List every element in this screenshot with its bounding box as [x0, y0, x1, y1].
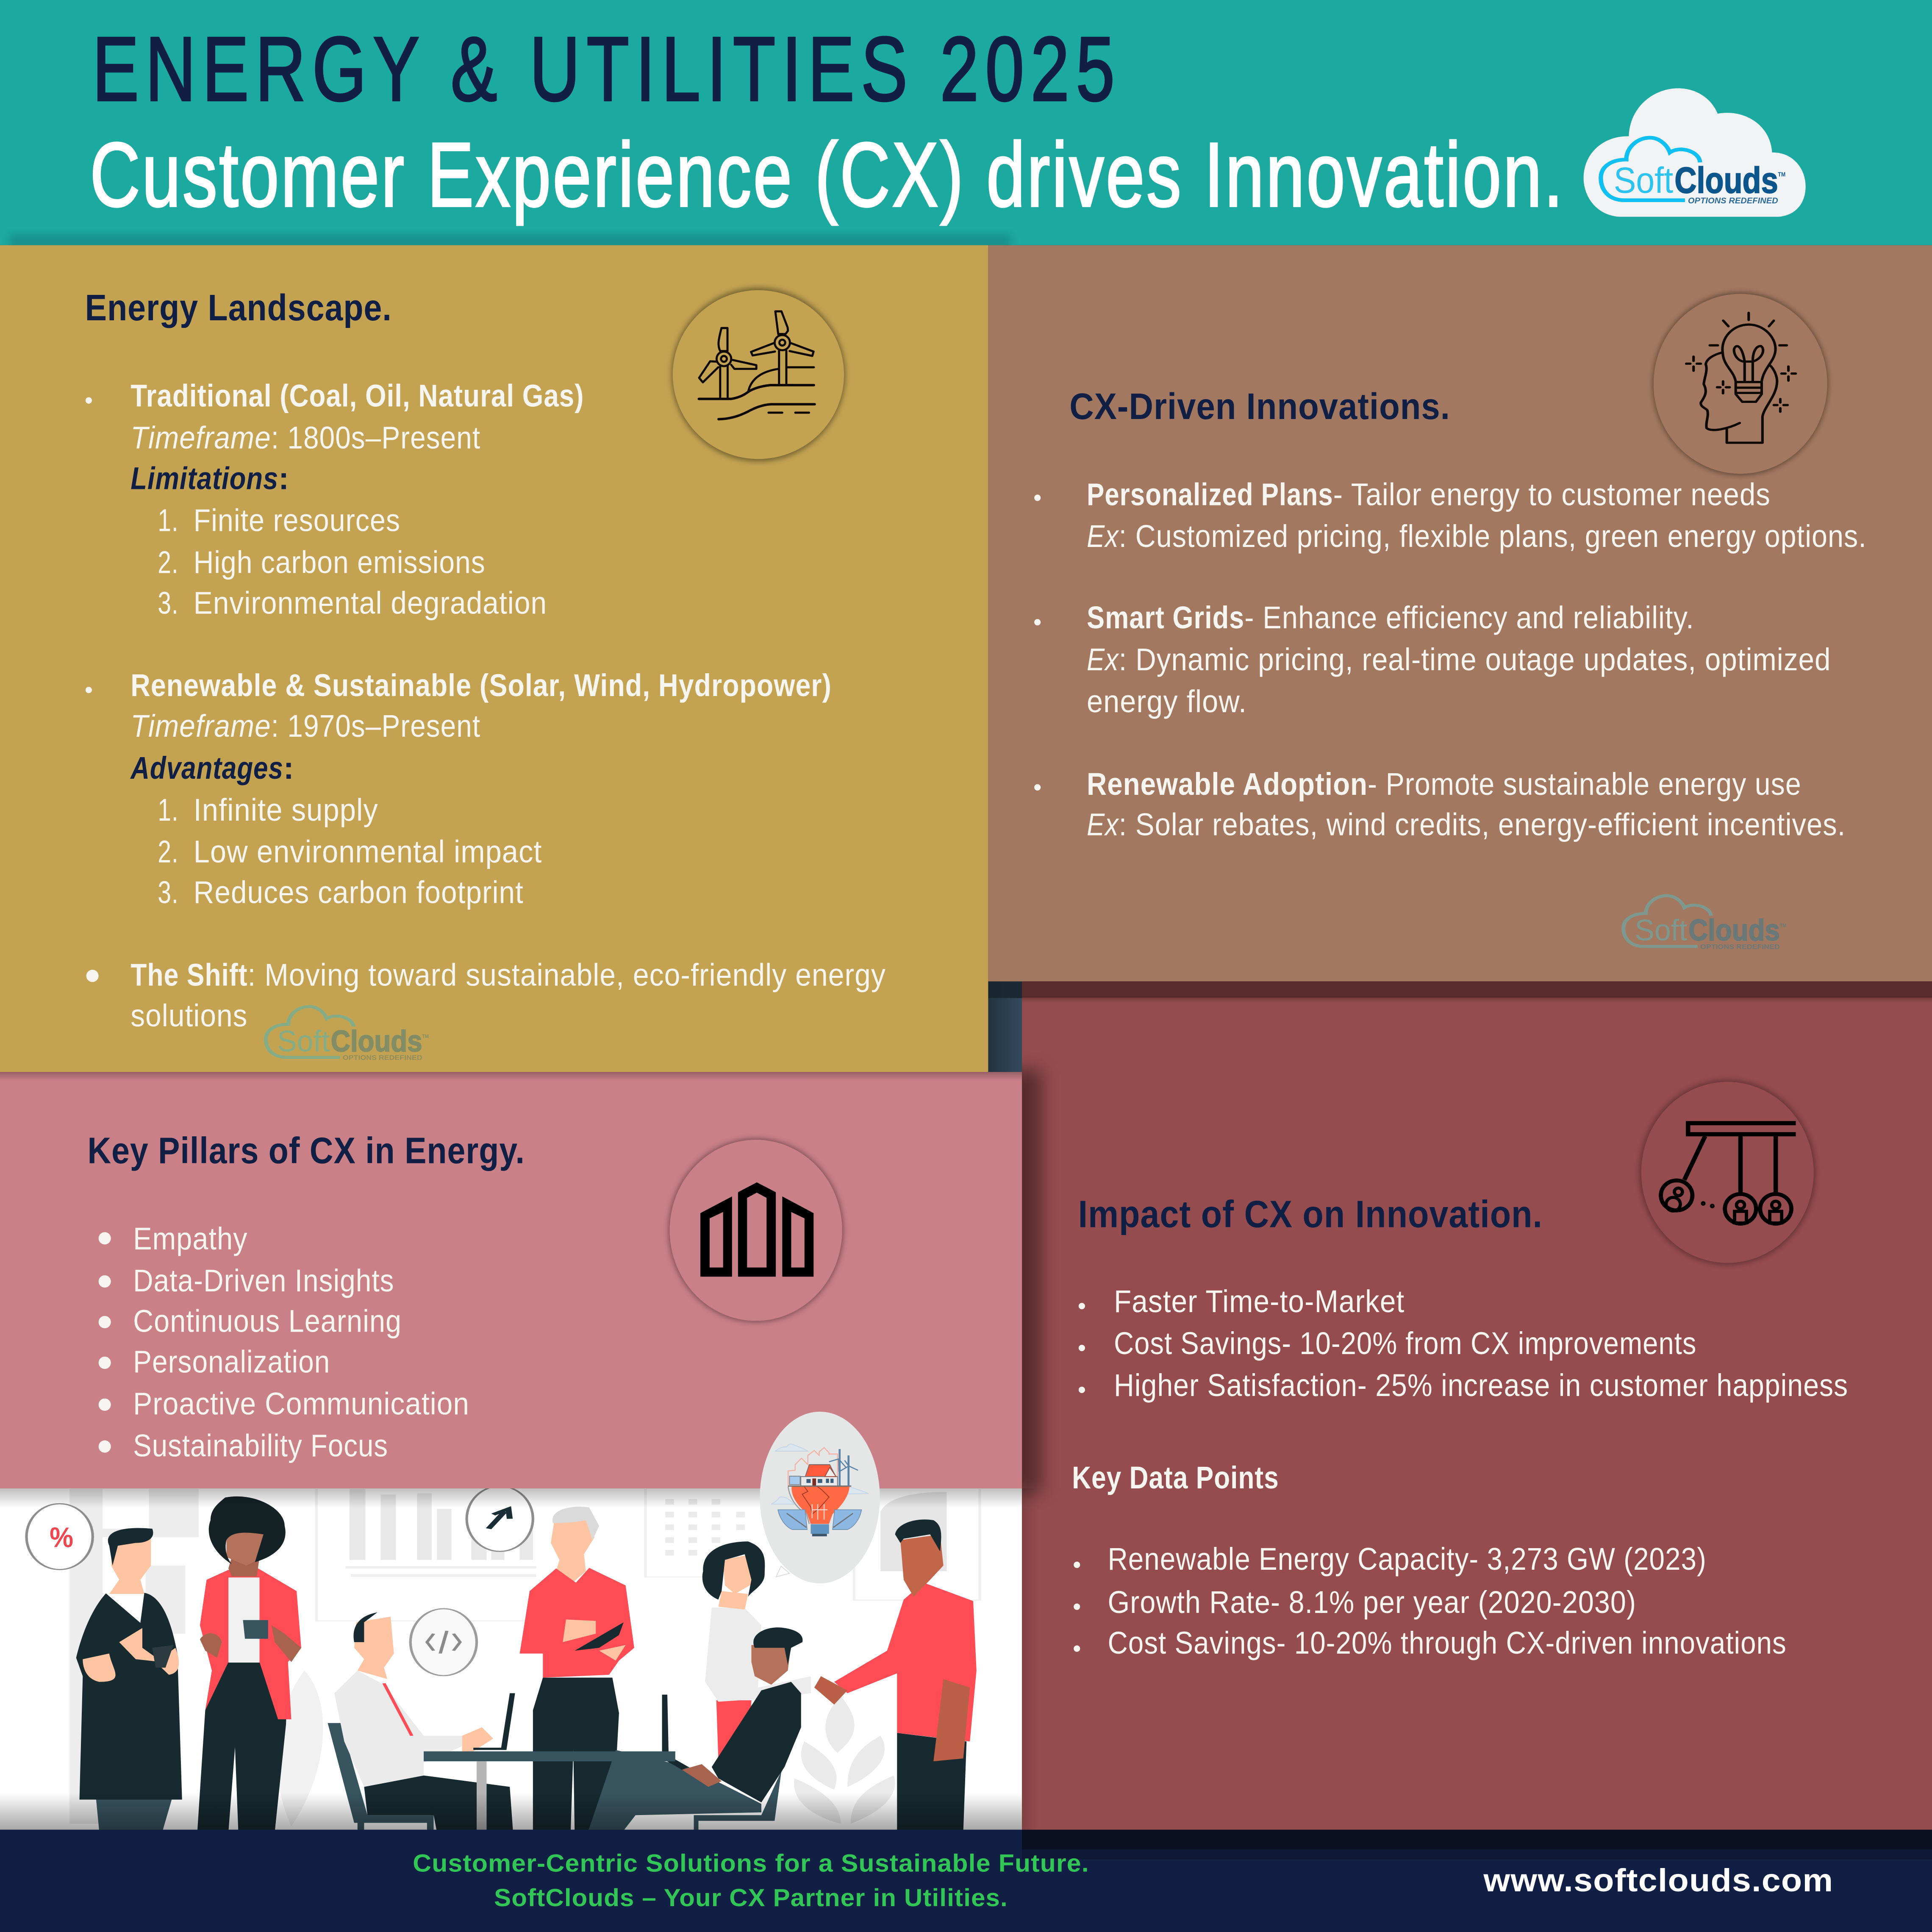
- text block: traditional energy: :: [278, 461, 289, 496]
- text block: renewable energy: Low environmental impact: [194, 834, 542, 869]
- list: key data points: Renewable Energy Capacity- 3,273 GW (2023): [1108, 1541, 1707, 1577]
- text block: renewable energy: 3.: [158, 875, 179, 910]
- text block: renewable energy: 2.: [158, 834, 179, 869]
- text block: smart grids: : Dynamic pricing, real-time outage updates, optimized: [1119, 642, 1831, 677]
- text block: smart grids: [1034, 600, 1831, 719]
- text block: traditional energy: 1.: [158, 502, 179, 538]
- list: pillars: Proactive Communication: [133, 1386, 469, 1421]
- panel: CX-driven innovations: [988, 245, 1932, 981]
- text block: renewable energy: Reduces carbon footprint: [194, 875, 524, 910]
- text block: personalized plans: [1034, 477, 1867, 554]
- logo: watermark gold panel: Soft: [277, 1024, 330, 1058]
- text block: renewable energy: Infinite supply: [194, 792, 378, 827]
- shadow: top of illustration: [0, 1488, 1022, 1508]
- list: pillars: Data-Driven Insights: [133, 1263, 394, 1298]
- logo: watermark gold panel: TM: [422, 1033, 429, 1039]
- connector strip: [988, 981, 1023, 1073]
- table: [424, 1752, 675, 1761]
- header band: [0, 0, 1932, 248]
- text block: renewable energy: : 1970s–Present: [271, 708, 480, 744]
- list: pillars: Empathy: [133, 1221, 248, 1256]
- logo: SoftClouds header: TM: [1778, 171, 1785, 178]
- logo: watermark brown panel: OPTIONS REDEFINED: [1700, 943, 1780, 950]
- icon: pendulum with people: [1639, 1080, 1815, 1265]
- text block: renewable adoption: Renewable Adoption: [1087, 766, 1368, 802]
- panel: key pillars of CX: [0, 1072, 1022, 1488]
- list: pillars: Personalization: [133, 1344, 330, 1380]
- text block: traditional energy: Limitations: [130, 461, 278, 496]
- speech bubble: sustainable energy bulb: [760, 1412, 880, 1583]
- tagline: SoftClouds – Your CX Partner in Utilities.: [494, 1884, 1008, 1912]
- text block: traditional energy: High carbon emissions: [194, 544, 486, 580]
- panel: energy landscape: [0, 245, 988, 1072]
- tagline: [413, 1850, 1089, 1912]
- text block: renewable adoption: Ex: [1087, 807, 1119, 842]
- table leg: [477, 1761, 486, 1832]
- text block: renewable adoption: [1034, 766, 1846, 842]
- logo: watermark brown panel: [1624, 896, 1786, 950]
- logo: watermark brown panel: TM: [1780, 922, 1786, 928]
- list: key data points: Growth Rate- 8.1% per year (2020-2030): [1108, 1585, 1636, 1620]
- text block: traditional energy: : 1800s–Present: [271, 420, 480, 455]
- logo: watermark gold panel: Clouds: [331, 1024, 422, 1058]
- list: key data points: Cost Savings- 10-20% through CX-driven innovations: [1108, 1625, 1787, 1660]
- heading: Impact of CX on Innovation: Impact of CX on Innovation.: [1078, 1193, 1543, 1236]
- figure: woman in white top: [702, 1541, 811, 1758]
- logo: SoftClouds header: Soft: [1614, 160, 1673, 201]
- shadow: bottom of illustration: [0, 1793, 1022, 1830]
- icon: wind turbines: [672, 288, 845, 461]
- text block: renewable energy: 1.: [158, 792, 179, 827]
- logo: watermark gold panel: [266, 1007, 429, 1061]
- list: impact items: Cost Savings- 10-20% from CX improvements: [1114, 1326, 1697, 1361]
- text block: smart grids: Ex: [1087, 642, 1119, 677]
- figure: man in red shirt shaking hands: [814, 1519, 977, 1832]
- text block: smart grids: - Enhance efficiency and reliability.: [1244, 600, 1694, 635]
- figure: standing man with tablet: [520, 1507, 634, 1832]
- heading: Key Pillars of CX in Energy: Key Pillars of CX in Energy.: [87, 1130, 525, 1171]
- list: key data points: [1074, 1541, 1787, 1660]
- website: www.softclouds.com: [1483, 1863, 1833, 1899]
- list: pillars: Continuous Learning: [133, 1304, 402, 1339]
- text block: the shift: The Shift: [130, 958, 248, 993]
- text block: renewable energy: Advantages: [130, 750, 283, 786]
- list: impact items: Faster Time-to-Market: [1114, 1284, 1405, 1319]
- text block: renewable energy: Timeframe: [130, 708, 271, 744]
- text block: renewable energy: [86, 668, 832, 910]
- text block: traditional energy: Environmental degradation: [194, 585, 547, 620]
- text block: traditional energy: Timeframe: [130, 420, 271, 455]
- heading: CX-Driven Innovations: CX-Driven Innovations.: [1069, 386, 1450, 427]
- panel: impact of CX on innovation: [1004, 981, 1932, 1830]
- logo: watermark gold panel: OPTIONS REDEFINED: [343, 1054, 422, 1061]
- text block: the shift: : Moving toward sustainable, eco-friendly energy: [248, 958, 886, 993]
- logo: watermark brown panel: Soft: [1635, 913, 1687, 947]
- heading: Key Data Points: Key Data Points: [1072, 1460, 1279, 1495]
- title: ENERGY & UTILITIES 2025: [92, 18, 1121, 120]
- text block: personalized plans: : Customized pricing, flexible plans, green energy options.: [1119, 519, 1867, 554]
- text block: renewable adoption: - Promote sustainable energy use: [1368, 766, 1802, 802]
- logo: SoftClouds header: OPTIONS REDEFINED: [1688, 197, 1778, 205]
- text block: traditional energy: Finite resources: [194, 502, 400, 538]
- figure: seated man shaking hands: [588, 1627, 802, 1832]
- icon: code speech bubble: [411, 1609, 477, 1676]
- icon: arrow speech bubble: [467, 1486, 533, 1552]
- list: impact items: [1079, 1284, 1848, 1403]
- text block: renewable energy: :: [283, 750, 294, 786]
- text block: renewable energy: Renewable & Sustainable (Solar, Wind, Hydropower): [130, 668, 832, 703]
- text block: traditional energy: 2.: [158, 544, 179, 580]
- text block: personalized plans: Ex: [1087, 519, 1119, 554]
- text block: traditional energy: Traditional (Coal, Oil, Natural Gas): [130, 378, 584, 414]
- text block: smart grids: energy flow.: [1087, 684, 1247, 719]
- figure: woman in red jacket: [197, 1496, 301, 1832]
- logo: watermark brown panel: Clouds: [1688, 913, 1780, 947]
- logo: SoftClouds header: Clouds: [1674, 160, 1778, 201]
- logo: SoftClouds header: [1584, 88, 1806, 217]
- text block: the shift: solutions: [130, 998, 248, 1033]
- icon: three pillars: [669, 1138, 844, 1322]
- text block: personalized plans: - Tailor energy to customer needs: [1333, 477, 1771, 512]
- icon: percent speech bubble: [27, 1504, 93, 1570]
- text block: renewable adoption: : Solar rebates, wind credits, energy-efficient incentives.: [1119, 807, 1846, 842]
- tagline: Customer-Centric Solutions for a Sustainable Future.: [413, 1849, 1089, 1877]
- figure: woman in black dress: [76, 1528, 182, 1832]
- heading: Energy Landscape: Energy Landscape.: [85, 287, 392, 328]
- list: pillars: [99, 1221, 469, 1463]
- text block: traditional energy: 3.: [158, 585, 179, 620]
- text block: smart grids: Smart Grids: [1087, 600, 1244, 635]
- list: pillars: Sustainability Focus: [133, 1428, 388, 1463]
- icon: percent speech bubble: %: [50, 1522, 73, 1553]
- illustration: team of people discussing: [0, 1486, 1022, 1832]
- text block: personalized plans: Personalized Plans: [1087, 477, 1333, 512]
- text block: traditional energy: [86, 378, 584, 620]
- figure: seated man with laptop: [328, 1613, 515, 1832]
- list: impact items: Higher Satisfaction- 25% increase in customer happiness: [1114, 1368, 1848, 1403]
- footer band: [0, 1830, 1932, 1932]
- text block: the shift: [86, 958, 886, 1033]
- icon: head with light bulb: [1653, 293, 1828, 475]
